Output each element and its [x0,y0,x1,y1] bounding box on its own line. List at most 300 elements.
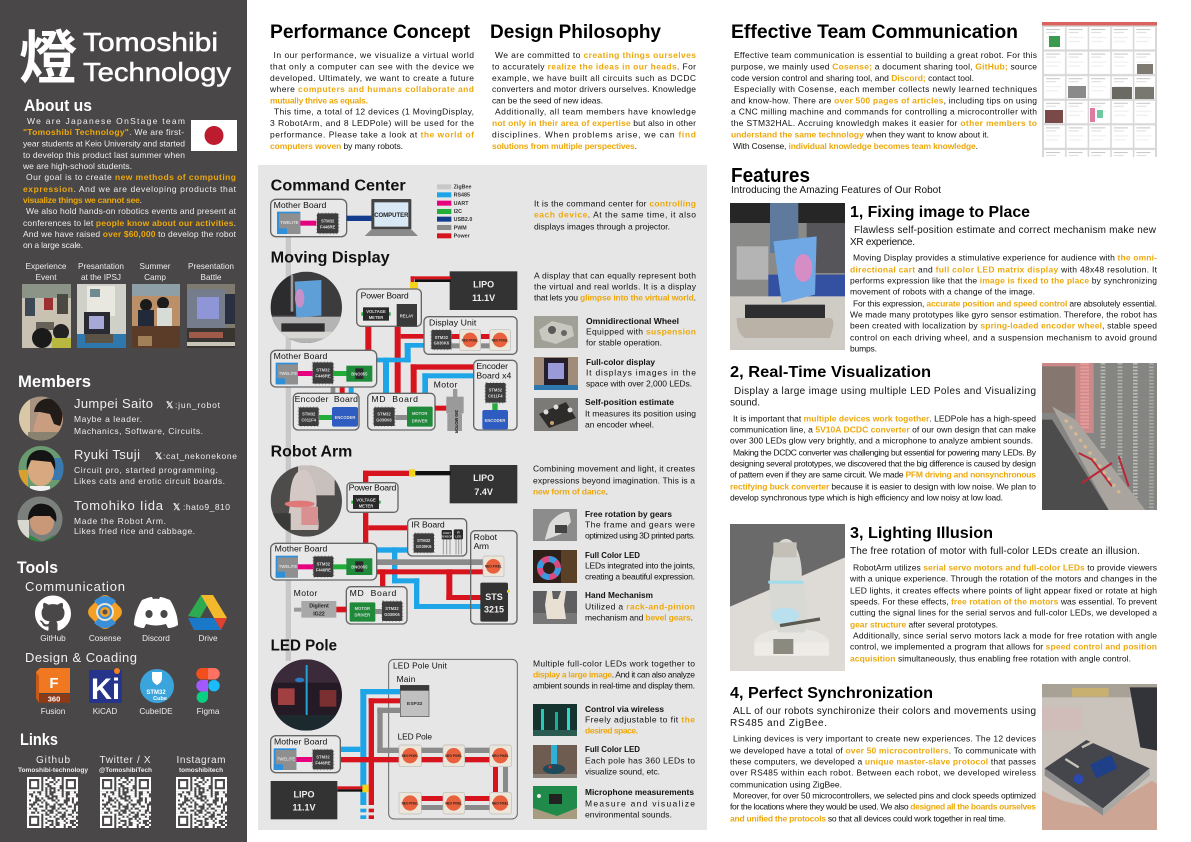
Encoder Board x4: STM32 [489,388,503,393]
legend: wire types [437,184,472,239]
item: Full Color LED (arm): Full Color LED [585,550,640,560]
heading: Tools: Tools [17,559,58,577]
feature 4: Perfect Synchronization: over RS485 within each robot. Between each robot, we developed wireless [730,768,1036,778]
Mother Board: F446RE [316,567,331,572]
text: Robot Arm description: expressions beyond imagination. This is a [533,476,695,486]
Power Board: Power Board [361,290,409,300]
Power Board [357,289,421,326]
icon: Drive: Drive [198,634,218,643]
diagram: Robot Arm [271,444,517,624]
icon: KiCAD [89,668,122,716]
icon: Discord [134,597,178,643]
feature 2: Real-Time Visualization: develop synchronous type which is high efficiency and low noisy at low load. [730,492,1003,502]
Encoder Board: STM32 [302,412,316,417]
text block: about us: on a large scale. [23,240,83,250]
IR Board: LIGHT [443,531,451,535]
MD Board: G030K6 [384,612,400,617]
legend: wire types: Power [454,233,470,239]
Power Board: RELAY [400,313,414,318]
section: Features heading: Introducing the Amazing Features of Our Robot [731,185,941,196]
member: Ryuki Tsuji: Ryuki Tsuji [74,447,140,462]
Power Board: VOLTAGE [356,497,376,502]
item: Full Color LED (pole): Each pole has 360 LEDs to [585,756,695,766]
diagram: Command Center: COMPUTER [374,213,409,219]
icon: Cosense: Cosense [89,634,122,643]
Mother Board: Mother Board [274,351,328,361]
photo: experience event: Experience [26,262,67,271]
feature 4: Perfect Synchronization: Moreover, for over 50 microcontrollers, we selected pins and clock speeds optimized [733,790,1036,800]
legend: wire types: I2C [454,209,462,215]
member: Ryuki Tsuji: 𝕏 [155,451,163,461]
feature 1: Fixing image to Place: directional cart and full color LED matrix display with 48x48 resolution. It [850,264,1158,274]
feature 1: Fixing image to Place: movement of robots with a change of the image. [850,286,1035,296]
item: Full Color LED (arm) [533,550,695,583]
member: Tomohiko Iida: Tomohiko Iida [74,498,164,513]
text block: about us: expression. And we are developing products that [23,184,237,194]
section: Design Philosophy: example, we have built all circuits such as DCDC [492,73,696,83]
panel: robots systems [258,165,707,830]
item: Hand Mechanism: Hand Mechanism [585,590,653,600]
section: Design Philosophy: converters and motor drivers ourselves. Knowledge [492,84,696,94]
Mother Board: STM32 [316,754,330,759]
IR Board: IR Board [411,519,445,529]
section: Performance Concept [269,22,474,151]
item: Free rotation by gears: The frame and gears were [585,520,695,530]
MD Board [346,587,407,624]
photo: presentation battle [187,262,235,348]
Power Board: METER [359,503,373,508]
feature 3: Lighting Illusion: with a unique experience. Through the rotation of the motors and changes in the [849,574,1157,584]
member: Tomohiko Iida: Made the Robot Arm. [74,516,166,526]
text: LED Pole description: Multiple full-color LEDs work together to [533,658,695,668]
LIPO battery: LIPO [473,473,494,483]
logo: Tomoshibi Technology [19,11,231,95]
feature 1: Fixing image to Place: For this expression, accurate position and speed control are absolutely essential. [853,298,1157,308]
LIPO battery: 11.1V [293,803,315,813]
feature 3: Lighting Illusion: RobotArm utilizes serial servo motors and full-color LEDs to provide viewers [853,562,1157,572]
QR link: Instagram: Instagram [176,755,226,766]
Encoder Board x4: C011F4 [488,394,503,399]
section: Design Philosophy: Additionally, all team members have knowledge [495,106,696,116]
Encoder Board: Encoder Board [295,394,358,404]
LIPO battery: 7.4V [474,487,493,497]
section: Effective Team Communication: Effective Team Communication [731,22,1018,43]
text block: about us: visualize things we cannot see. [23,195,142,205]
Power Board: Power Board [349,483,397,493]
Mother Board: F446RE [315,374,331,379]
feature 2: Real-Time Visualization: Display a large image using multiple LED Poles and Visualizing [734,386,1036,397]
photo: summer camp [132,262,180,348]
Power Board: METER [369,315,383,320]
Power Board [347,483,398,512]
photo: summer camp: Camp [144,273,166,282]
item: Self-position estimate [534,397,696,431]
icon: Discord: Discord [142,634,170,643]
member: Jumpei Saito: :jun_robot [175,400,221,410]
section: Features heading: Features [731,165,810,187]
item: Microphone measurements: environmental sounds. [585,810,672,820]
item: Control via wireless: Control via wireless [585,704,664,714]
feature 1: Fixing image to Place: Moving Display provides a stimulative experience for audience with the omni- [853,252,1157,262]
Power Board: VOLTAGE [366,309,386,314]
icon: Figma [196,668,220,716]
icon: CubeIDE: STM32 [146,690,166,696]
Robot Arm unit [471,531,517,624]
text block: about us: conferences to let people know about our activities. [23,218,236,228]
text: Robot Arm description [533,464,695,496]
section: Effective Team Communication: With Cosense, individual knowledge becomes team knowledge. [733,141,978,151]
Motor: Motor [434,380,457,390]
feature 4: Perfect Synchronization: we developed have a total of over 50 microcontrollers. To communicate with [729,746,1036,756]
icon: Japanese flag [191,120,237,151]
section: Design Philosophy: not only in their area of expertise but also in other [492,118,696,128]
item: Omnidirectional Wheel: Equipped with suspension [586,326,696,336]
diagram: LED Pole: LED Pole [271,637,337,654]
feature 3: Lighting Illusion: 3, Lighting Illusion [850,525,993,542]
feature 4: Perfect Synchronization [729,684,1157,830]
section: Performance Concept: performance. Please take a look at the world of [270,130,474,140]
member: Jumpei Saito [18,396,221,442]
diagram: Command Center: STM32 [321,218,335,223]
feature 3: Lighting Illusion: The free rotation of motor with full-color LEDs create an illusion. [850,546,1140,557]
icon: CubeIDE [139,669,174,716]
feature 2: Real-Time Visualization: over 300 LEDs glow very brightly, and a microphone to analyze ambient sounds. [730,436,1033,446]
photo: LED pole circle [271,659,342,731]
item: Self-position estimate: Self-position estimate [585,397,674,407]
item: Full Color LED (pole): Full Color LED [585,744,640,754]
feature 2: Real-Time Visualization: communication line, a 5V10A DCDC converter of our own design that can make [730,424,1036,434]
section: Design Philosophy: Design Philosophy [490,22,661,43]
icon: CubeIDE: Cube [153,696,167,702]
icon: GitHub: GitHub [40,634,66,643]
feature 4: Perfect Synchronization: these computers, we developed a unique master-slave protocol that passes [730,756,1036,766]
text block: about us: We are Japanese OnStage team [27,116,185,126]
MD Board: STM32 [377,412,391,417]
Display Unit: Display Unit [429,317,477,327]
section: Design Philosophy: solutions from multiple perspectives. [492,141,637,151]
Mother Board: Mother Board [275,544,328,554]
section: Design Philosophy: can be the seed of new ideas. [492,96,603,106]
Robot Arm unit: Robot [474,532,498,542]
section: Effective Team Communication: the STM32HAL. Accruing knowledgh makes it easier for other members to [731,118,1037,128]
diagram: Command Center: TWELITE [280,220,299,225]
feature 3: Lighting Illusion: Additionally, since serial servo motors lack a mode for free rotation with angle [853,630,1157,640]
LIPO battery: 11.1V [472,293,495,303]
item: Omnidirectional Wheel: Omnidirectional Wheel [586,316,679,326]
subheading: Design and Coading: Design & Coading [25,650,137,665]
icon: Cosense [85,592,125,643]
text: Moving Display description [534,270,697,302]
diagram: LED Pole: Main [397,674,416,684]
feature 1: Fixing image to Place: been created with localization by spring-loaded encoder wheel, stable speed [850,320,1157,330]
logo: Tomoshibi Technology: 燈 [19,11,77,95]
photo: presentation battle: Battle [201,273,222,282]
icon: Fusion [36,668,70,716]
item: Self-position estimate: an encoder wheel. [585,420,654,430]
photo: LED poles [1042,363,1157,510]
Motor: Motor [294,588,317,598]
feature 1: Fixing image to Place: We made many prototypes like gyro sensor estimation. Therefore, the robot has [850,310,1157,320]
LIPO battery: LIPO [294,789,314,799]
feature 1: Fixing image to Place: Flawless self-position estimate and correct mechanism make new [854,225,1157,236]
LIPO battery [450,465,517,503]
section: Performance Concept: 3 RobotArm, and 8 LEDPole) will be used for the [270,118,474,128]
QR link: Github [18,755,88,828]
photo: moving display circle [271,272,342,343]
item: Full-color display: It displays images in the [586,368,696,378]
photo: robot arm [730,524,845,671]
feature 3: Lighting Illusion [730,524,1158,671]
section: Performance Concept: In our performance, we visualize a virtual world [274,50,474,60]
feature 2: Real-Time Visualization: 2, Real-Time Visualization [730,364,931,381]
icon: KiCAD: KiCAD [93,707,117,716]
IR Board: SENSOR [441,534,453,538]
section: Design Philosophy: to accurately realize the ideas in our heads. For [492,62,696,72]
section: Features heading [731,165,941,196]
photo: presentation battle: Presentation [188,262,234,271]
feature 2: Real-Time Visualization: designing several prototypes, we discovered that the big difference is caused by design [730,458,1036,468]
LED pole pixels: NEO PIXEL [445,801,462,805]
LED pole pixels: NEO PIXEL [402,754,418,758]
section: Effective Team Communication: and know-how. There are over 500 pages of articles, including tips on using [731,96,1037,106]
item: Free rotation by gears: Free rotation by gears [585,509,672,519]
section: Performance Concept: Performance Concept [270,22,471,43]
icon: Fusion: Fusion [41,707,66,716]
Encoder Board x4: Board x4 [476,370,512,380]
Encoder Board x4: ENCODER [485,418,505,423]
text block: about us: Our goal is to create new methods of computing [26,172,236,182]
item: Full-color display [534,357,696,390]
feature 4: Perfect Synchronization: communication using ZigBee. [730,780,842,790]
QR link: Twitter [99,755,152,828]
feature 3: Lighting Illusion: speeds. For these effects, free rotation of the motors was essential. To prevent [850,596,1158,606]
screenshot: Cosense pages [1042,22,1157,157]
Mother Board: BNO055 [351,564,368,569]
Mother Board [271,350,377,387]
section: Design Philosophy [490,22,696,151]
legend: wire types: USB2.0 [454,217,472,223]
item: Control via wireless: desired space. [585,726,638,736]
section: Performance Concept: mutually thrive as equals. [270,96,368,106]
icon: Fusion: F [49,675,59,692]
connectors to Encoder Board [331,387,354,394]
Encoder Board x4 [474,360,517,430]
MD Board: MOTOR [412,411,427,416]
Robot Arm unit: Arm [474,541,489,551]
Display Unit: NEO PIXEL [492,338,508,342]
feature 1: Fixing image to Place: XR experience. [850,237,915,248]
diagram: Command Center: F446RE [320,224,336,229]
section: Design Philosophy: disciplines. When problems arise, we can find [492,130,696,140]
icon: KiCAD: Ki [91,673,120,706]
feature 1: Fixing image to Place: control on each driving wheel, and a suspension mechanism to avoid ground [850,332,1157,342]
MD Board: MOTOR [355,606,370,611]
IR Board [408,519,467,556]
Mother Board: STM32 [316,368,330,373]
item: Microphone measurements: Measure and visualize [585,798,695,808]
diagram: Moving Display: Moving Display [271,249,390,266]
LIPO battery [271,781,369,819]
QR link: Instagram [176,755,227,828]
text: LED Pole description: display a large image. And it can also analyze [533,670,695,680]
icon: CubeIDE: CubeIDE [139,707,173,716]
section: Effective Team Communication: Especially with Cosense, each member collects newly learned techniques [734,84,1037,94]
member: Tomohiko Iida: Likes fried rice and cabbage. [74,526,195,536]
photo: moving display [730,203,845,350]
item: Microphone measurements [533,786,695,820]
diagram: Command Center: Command Center [271,178,406,195]
diagram: Robot Arm: Robot Arm [271,444,352,461]
Display Unit: STM32 [435,335,449,340]
text: Command Center description: It is the command center for controlling [534,198,696,208]
Motor: IG22 [313,611,325,617]
photo: experience event [22,262,71,348]
feature 2: Real-Time Visualization: It is important that multiple devices work together. LEDPole has a high-speed [733,414,1036,424]
text block: about us: We also hold hands-on robotics events and present at [26,206,237,216]
QR link: Github: Tomoshibi-technology [18,767,88,774]
section: Effective Team Communication: Effective team communication is essential to building a great robot. For this [734,50,1037,60]
feature 3: Lighting Illusion: acquisition simultaneously, thus enabling free rotation with angle control. [850,654,1131,664]
MD Board: MD Board [371,394,418,404]
Mother Board: BNO055 [351,371,368,376]
Mother Board: TWELITE [279,371,297,376]
MD Board: MD Board [350,588,397,598]
feature 1: Fixing image to Place: bumps. [850,344,877,354]
member: Jumpei Saito: Jumpei Saito [74,396,153,411]
diagram: Command Center: Mother Board [274,200,327,210]
photo: experience event: Event [36,273,57,282]
feature 1: Fixing image to Place: performs expression like that the image is fixed to the place by synchronizing [850,276,1157,286]
feature 2: Real-Time Visualization: sound. [730,398,760,408]
legend: wire types: PWM [454,225,467,231]
text: Moving Display description: A display that can equally represent both [534,270,696,280]
heading: Links: Links [20,731,58,749]
text block: about us: to develop this product last summer when [23,150,185,160]
item: Hand Mechanism: mechanism and bevel gears. [585,612,693,622]
feature 4: Perfect Synchronization: ALL of our robots synchironize their colors and movements using [733,706,1036,717]
section: Performance Concept: This time, a total of 12 devices (1 MovingDisplay, [274,106,474,116]
section: Performance Concept: where computers and humans collaborate and [269,84,474,94]
Motor [434,380,464,433]
legend: wire types: RS485 [454,192,470,198]
member: Ryuki Tsuji [18,446,237,492]
Motor: 380 MOTOR [454,410,459,433]
LED pole pixels: NEO PIXEL [492,801,509,805]
photo: presentation at the IPSJ: Presantation [78,262,124,271]
section: Effective Team Communication: code version control and sharing tool, and Discord; contact tool. [731,73,974,83]
feature 2: Real-Time Visualization: of pattern even if they are same circuit. We made PFM driving and nonsynchronous [730,470,1036,480]
section: Effective Team Communication: a CNC milling machine and commands for controlling a microcontroller with [731,106,1037,116]
section: Effective Team Communication [731,22,1037,151]
photo: presentation at the IPSJ: at the IPSJ [81,273,121,282]
member: Tomohiko Iida [17,496,230,543]
diagram: LED Pole [271,637,517,819]
item: Omnidirectional Wheel: for stable operation. [586,338,662,348]
LED pole pixels: NEO PIXEL [402,801,418,805]
MD Board: G030K6 [376,418,392,423]
section: Performance Concept: that only a computer can see with the device we [270,62,474,72]
member: Jumpei Saito: Maybe a leader. [74,414,142,424]
section: Effective Team Communication: understand the same technology when they want to know about it. [731,130,989,140]
Encoder Board [293,393,359,430]
member: Ryuki Tsuji: Likes cats and erotic circuit boards. [74,476,225,486]
MD Board [368,393,435,430]
item: Microphone measurements: Microphone measurements [585,787,694,797]
logo: Tomoshibi Technology: Technology [83,57,231,87]
diagram: LED Pole: LED Pole Unit [393,661,448,671]
Encoder Board: ENCODER [335,415,355,420]
diagram: Command Center [271,178,418,237]
ESP32 [400,685,429,717]
feature 2: Real-Time Visualization: rectifying buck converter because it is easier to design with low noise. We plan to [730,482,1036,492]
feature 3: Lighting Illusion: LED lights, it creates effects where points of light appear fixed or rotate at high [850,586,1157,596]
item: Full Color LED (arm): LEDs integrated into the joints, [585,560,695,570]
Robot Arm unit: NEO PIXEL [485,565,502,569]
icon: GitHub [35,596,71,643]
section: Performance Concept: developed. Ultimately, we want to create a future [270,73,474,83]
feature 1: Fixing image to Place: 1, Fixing image to Place [850,204,1030,221]
feature 4: Perfect Synchronization: RS485 and ZigBee. [730,718,827,729]
feature 4: Perfect Synchronization: for the locations where they would be used. We also designed all the boards ourselves [730,802,1036,812]
item: Full Color LED (pole): visualize sound, etc. [585,766,660,776]
text block: about us: year students at Keio University and started [23,138,185,148]
member: Jumpei Saito: Machanics, Software, Circuits. [74,426,203,436]
LED pole pixels: NEO PIXEL [445,754,462,758]
legend: wire types: ZigBee [454,184,471,190]
Encoder Board x4: Encoder [476,361,508,371]
LED pole pixels: NEO PIXEL [492,754,509,758]
LIPO battery: LIPO [473,280,494,290]
feature 2: Real-Time Visualization: Making the DCDC converter was challenging but essential for powering many LEDs. By [733,448,1037,458]
item: Full-color display: Full-color display [586,357,655,367]
icon: Figma: Figma [197,707,220,716]
Mother Board: F446RE [315,760,331,765]
line: ZigBee backbone [286,236,291,661]
feature 4: Perfect Synchronization: Linking devices is very important to create new experiences. The 12 devices [733,734,1036,744]
feature 3: Lighting Illusion: control, we implemented a program that allows for speed control and position [850,642,1157,652]
text: LED Pole description: ambient sounds in real-time and display them. [533,680,695,690]
item: Full Color LED (pole) [533,744,695,778]
Mother Board: Mother Board [274,736,328,746]
MD Board: STM32 [385,606,399,611]
section: Effective Team Communication: purpose, we mainly used Cosense; a document sharing tool, GitHub; source [731,62,1037,72]
MD Board: DRIVER [354,613,370,618]
feature 2: Real-Time Visualization [730,363,1157,510]
feature 4: Perfect Synchronization: 4, Perfect Synchronization [730,685,933,702]
LIPO battery [450,271,517,310]
Robot Arm unit: STS [485,592,503,602]
IR Board: IR [457,531,461,535]
Mother Board: TWELITE [279,564,297,569]
member: Tomohiko Iida: 𝕏 [173,502,181,512]
photo: control boards [1042,684,1157,830]
text: Moving Display description: that lets you glimpse into the virtual world. [534,292,696,302]
QR link: Twitter: Twitter / X [100,755,151,766]
text: Command Center description: displays images through a projector. [534,222,670,232]
feature 1: Fixing image to Place [730,203,1158,354]
legend: wire types: UART [454,201,469,207]
member: Ryuki Tsuji: :cat_nekonekone [163,451,237,461]
text: Moving Display description: the virtual and real worlds. It is a display [534,282,697,292]
item: Free rotation by gears: optimized using 3D printed parts. [585,530,695,540]
heading: About us: About us [24,97,92,115]
item: Control via wireless: Freely adjustable to fit the [585,714,695,724]
IR Board: STM32 [417,538,431,543]
heading: Members: Members [18,373,91,391]
photo: robot arm circle [271,465,342,537]
item: Full Color LED (arm): creating a beautiful expression. [585,572,695,582]
text block: about us: "Tomoshibi Technology". We are first- [23,127,184,137]
